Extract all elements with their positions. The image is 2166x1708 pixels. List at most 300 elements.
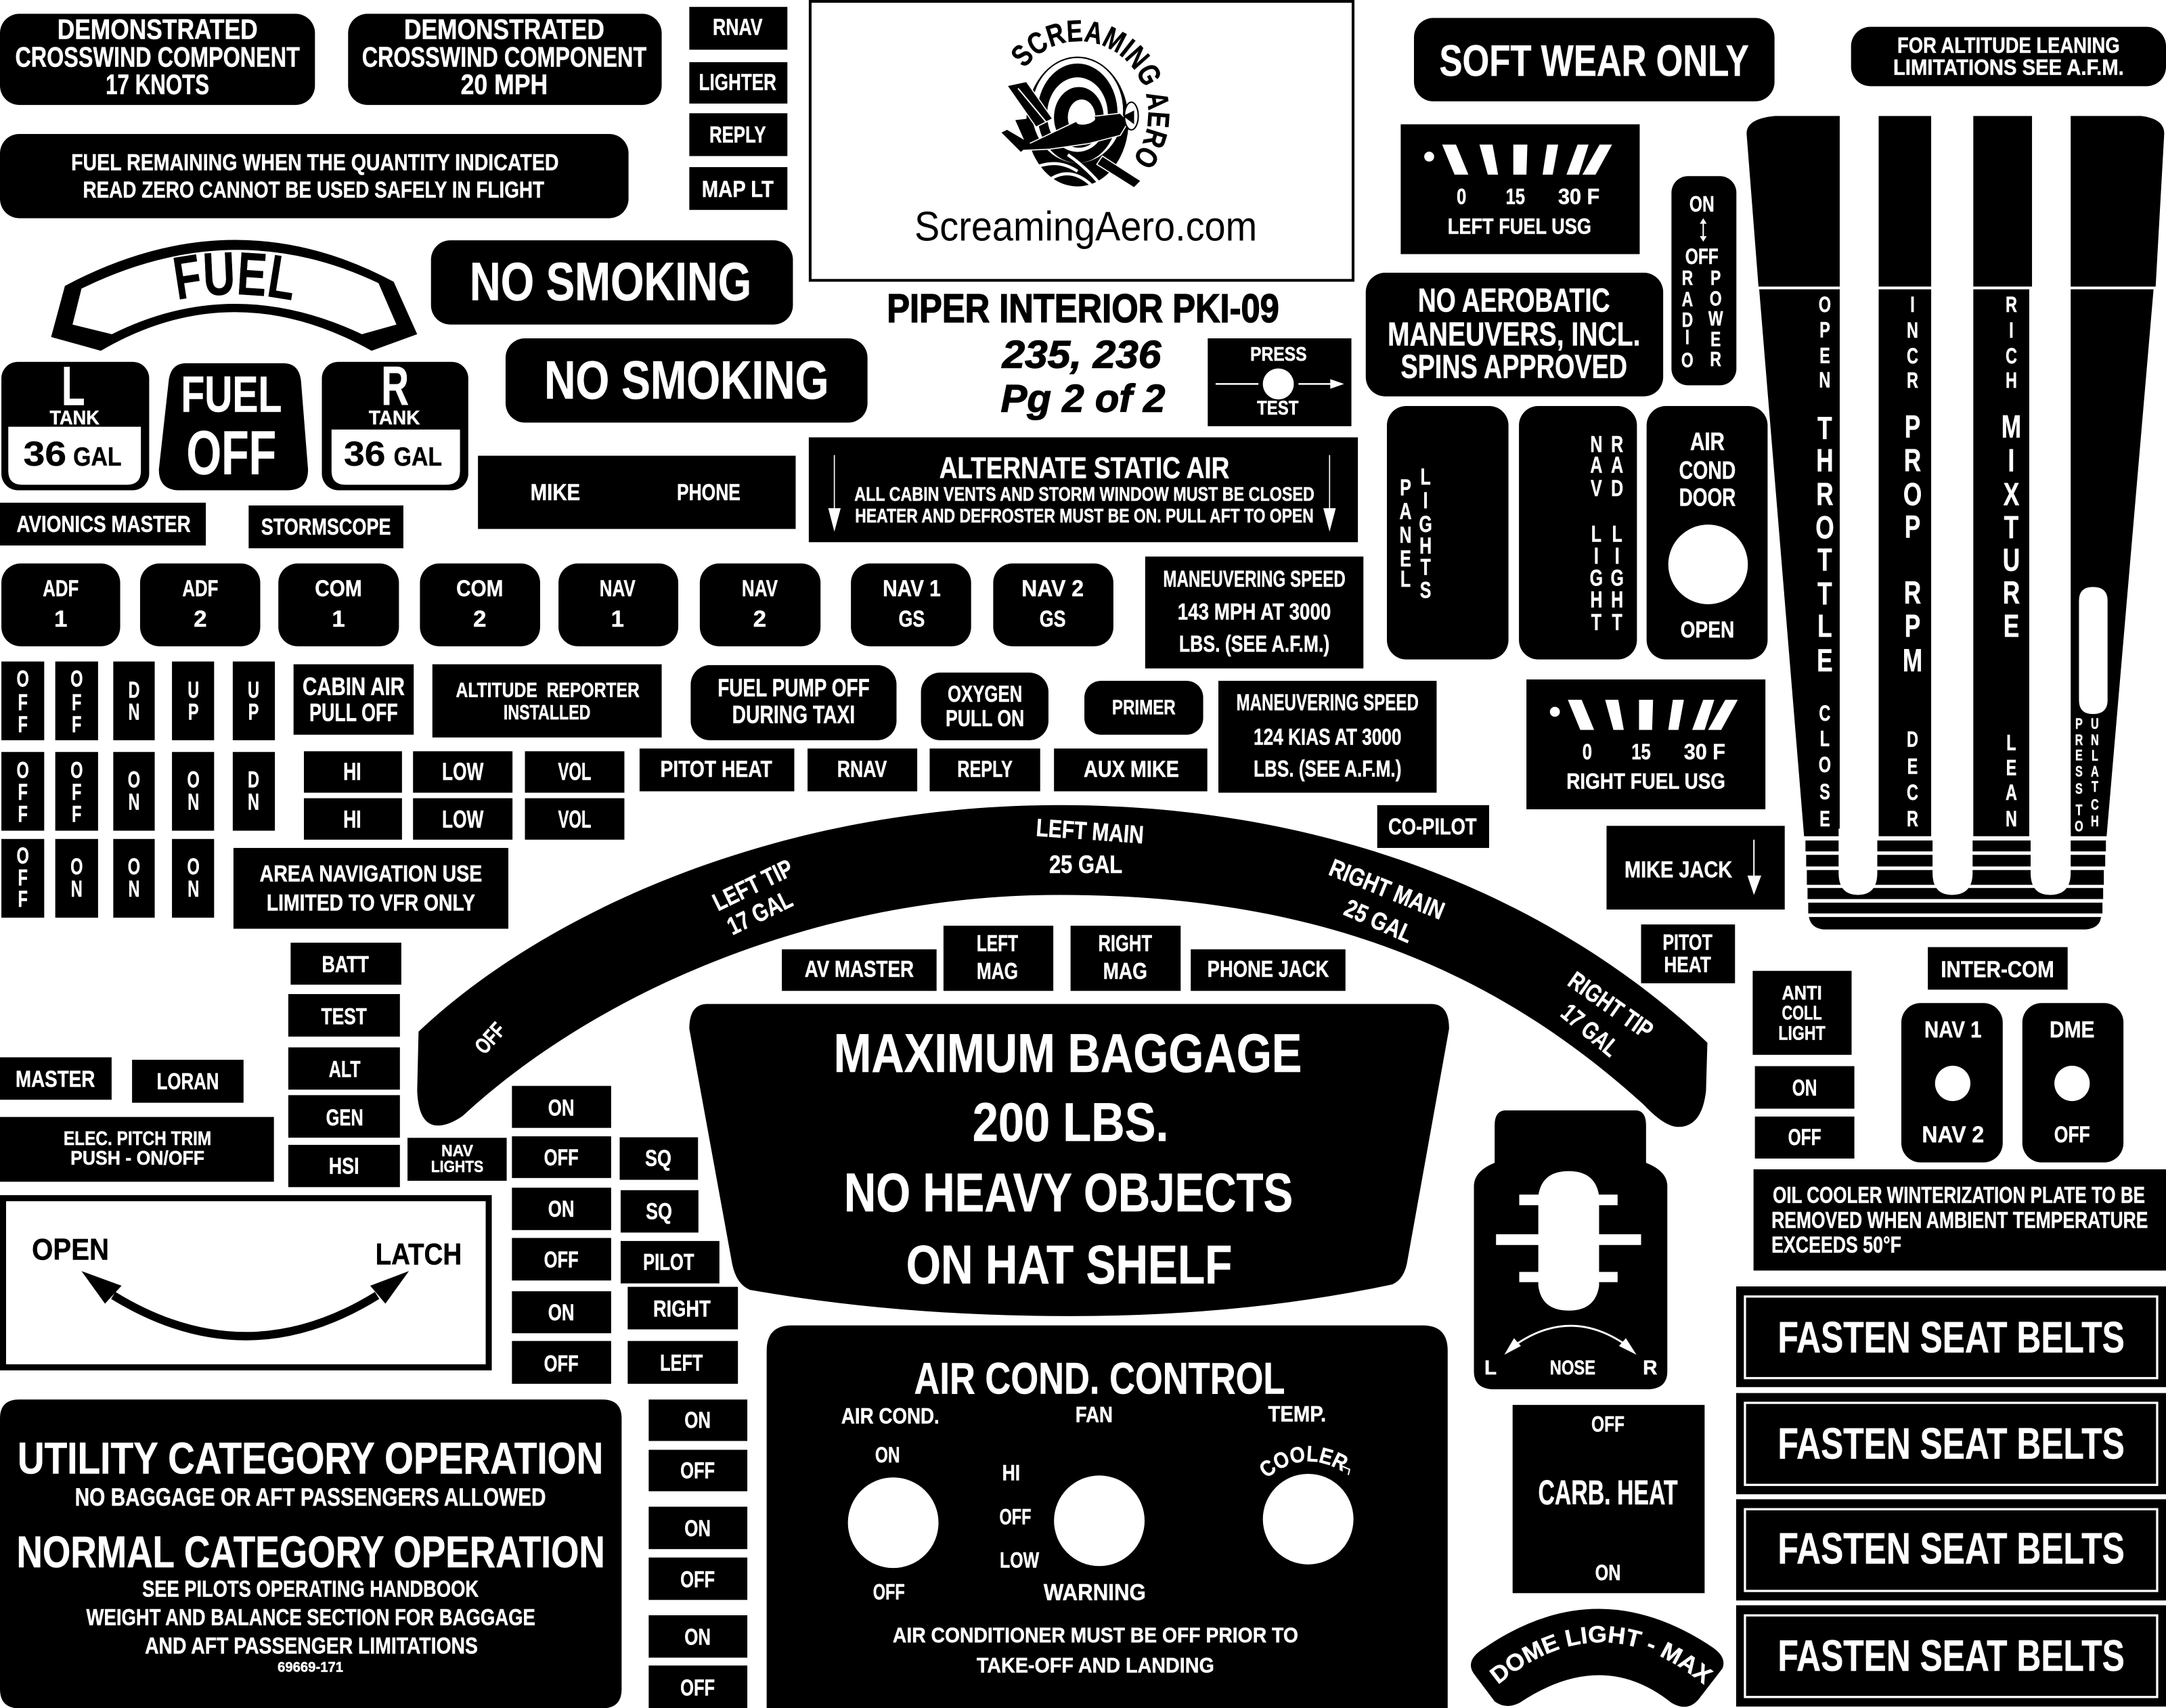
placard: left tank: TANK	[49, 407, 100, 429]
panel: nose gear selector: L	[1484, 1357, 1497, 1379]
fuel selector: left main: LEFT MAIN	[1035, 813, 1145, 849]
placard: nav and rad lights: A	[1611, 453, 1623, 478]
gauge: right fuel usage: 15	[1631, 739, 1651, 764]
vertical switch labels: row 2: O	[70, 757, 83, 784]
press to unlatch labels: E	[2075, 747, 2083, 764]
placard: radio power: O	[1710, 287, 1722, 310]
switch: COM 1: COM	[315, 576, 362, 602]
placard: nav and rad lights: G	[1590, 566, 1603, 591]
mixture labels: E	[2006, 756, 2016, 780]
label: OFF right	[1755, 1117, 1855, 1159]
prop labels	[1903, 292, 1922, 832]
label: AUX MIKE: AUX MIKE	[1084, 757, 1179, 782]
press to unlatch labels: T	[2075, 802, 2082, 819]
switch: COM 1: 1	[332, 606, 345, 632]
vertical switch labels: row 1: F	[72, 690, 81, 716]
label: ALT: ALT	[329, 1056, 361, 1082]
mixture labels: T	[2004, 510, 2018, 545]
vertical switch labels: row 3: O	[128, 854, 140, 880]
arrow: mike jack down	[1748, 840, 1761, 895]
label: INTER-COM	[1928, 947, 2068, 989]
throttle labels: S	[1819, 780, 1830, 805]
label group: hi low vol: VOL	[558, 806, 591, 833]
placard: no aerobatic maneuvers: MANEUVERS, INCL.	[1388, 317, 1640, 353]
switch: NAV 2	[700, 564, 820, 646]
placard: left tank: L	[62, 355, 85, 417]
label: RNAV lower	[808, 748, 917, 791]
label: LEFT	[627, 1341, 738, 1384]
throttle labels: O	[1819, 292, 1831, 317]
placard: oxygen pull on: OXYGEN	[948, 681, 1022, 707]
placard: open latch: LATCH	[376, 1236, 462, 1271]
placard: mike phone	[478, 455, 796, 529]
label: OFF right: OFF	[1788, 1125, 1821, 1150]
control: fan knob	[1000, 1401, 1146, 1606]
vertical switch labels: row 2: N	[128, 789, 139, 815]
placard: no aerobatic maneuvers: NO AEROBATIC	[1418, 283, 1610, 319]
throttle labels: R	[1816, 476, 1834, 512]
throttle labels: T	[1817, 410, 1832, 446]
label: NAV LIGHTS	[407, 1138, 507, 1181]
placard: radio power	[1671, 176, 1736, 385]
label: SQ 2: SQ	[646, 1199, 672, 1225]
chart: fuel selector arc	[417, 805, 1707, 1127]
throttle labels: T	[1817, 576, 1832, 612]
on off column lower: OFF	[680, 1676, 715, 1701]
label: CO-PILOT: CO-PILOT	[1388, 814, 1477, 840]
label: REPLY: REPLY	[709, 122, 766, 148]
placard: radio power: R	[1682, 267, 1693, 290]
placard: fuel pump off during taxi	[690, 665, 896, 740]
mixture labels: E	[2004, 608, 2019, 644]
placard: press test: TEST	[1257, 398, 1299, 420]
throttle labels: T	[1817, 541, 1832, 577]
placard: no aerobatic maneuvers: SPINS APPROVED	[1400, 349, 1627, 385]
placard: panel lights: S	[1420, 578, 1431, 604]
vertical switch labels: row 2: N	[187, 789, 199, 815]
placard: cabin air pull off: PULL OFF	[309, 699, 398, 727]
label: RIGHT	[627, 1287, 738, 1329]
on off column center: ON	[548, 1300, 575, 1326]
vertical switch labels: row 1: F	[18, 712, 28, 738]
switch plate: DME OFF: OFF	[2054, 1122, 2090, 1148]
vertical switch labels: row 2	[1, 752, 275, 831]
placard: radio power: A	[1682, 288, 1693, 311]
placard: demonstrated crosswind 20 mph: CROSSWIND COMPONENT	[362, 41, 646, 72]
vertical switch labels: row 3: F	[18, 865, 28, 891]
label: ALT	[288, 1048, 400, 1089]
vertical switch labels: row 2: D	[248, 767, 259, 793]
press to unlatch labels: S	[2075, 780, 2083, 798]
placard: utility and normal category: SEE PILOTS OPERATING HANDBOOK	[142, 1577, 479, 1602]
press to unlatch labels: C	[2091, 796, 2099, 813]
control: air cond knob: AIR COND.	[841, 1403, 940, 1428]
vertical switch labels: row 1: U	[187, 677, 199, 703]
placard: oxygen pull on: PULL ON	[946, 706, 1024, 732]
label: REPLY	[689, 113, 787, 156]
on off column center: OFF	[544, 1247, 579, 1273]
subtitle: page number: Pg 2 of 2	[1001, 378, 1166, 421]
label: anti coll light	[1752, 971, 1852, 1055]
placard: no smoking 2: NO SMOKING	[544, 350, 828, 410]
placard: demonstrated crosswind 17 knots	[0, 14, 315, 105]
label: anti coll light: COLL	[1782, 1003, 1822, 1025]
placard: nav and rad lights: H	[1611, 587, 1623, 613]
placard: utility and normal category	[0, 1399, 621, 1708]
label: RIGHT MAG	[1071, 926, 1180, 991]
placard: air cond door: DOOR	[1679, 483, 1736, 511]
placard: no aerobatic maneuvers	[1366, 273, 1663, 397]
label: ON right: ON	[1792, 1075, 1817, 1101]
label: MAP LT	[689, 167, 787, 210]
placard: alternate static air: HEATER AND DEFROSTER MUST BE ON. PULL AFT TO OPEN	[855, 505, 1314, 527]
placard: maximum baggage: ON HAT SHELF	[906, 1234, 1232, 1295]
placard: fuel off	[159, 363, 308, 490]
label: LEFT MAG	[944, 926, 1053, 991]
placard: radio power: ON	[1689, 192, 1715, 217]
placard: fuel pump off during taxi: FUEL PUMP OFF	[717, 674, 870, 702]
panel: air cond control: TAKE-OFF AND LANDING	[977, 1653, 1214, 1677]
placard: panel lights: E	[1400, 546, 1411, 572]
placard: open latch	[3, 1198, 489, 1368]
fuel selector: right tip: 17 GAL	[1555, 998, 1624, 1062]
placard: soft wear only	[1414, 18, 1775, 102]
placard: radio power: P	[1710, 267, 1721, 290]
on off column center: ON	[548, 1095, 575, 1121]
placard: nav and rad lights	[1519, 406, 1637, 659]
control: air cond knob: OFF	[873, 1579, 905, 1604]
gauge: left fuel usage: 0	[1457, 183, 1466, 208]
prop labels: D	[1907, 727, 1918, 752]
placard: panel lights: G	[1419, 512, 1432, 537]
placard: demonstrated crosswind 20 mph: DEMONSTRATED	[404, 14, 604, 45]
mixture labels: U	[2003, 541, 2020, 577]
vertical switch labels: row 2: F	[18, 780, 28, 805]
switch: NAV 1 GS: GS	[899, 606, 925, 632]
label: pitot heat right	[1641, 924, 1735, 983]
placard: fasten seat belts 2	[1736, 1393, 2166, 1494]
panel: nose gear selector: R	[1643, 1357, 1657, 1379]
placard: open latch: OPEN	[32, 1232, 109, 1267]
prop labels: P	[1905, 608, 1920, 644]
throttle labels	[1815, 292, 1834, 832]
label: GEN	[288, 1095, 400, 1138]
switch plate: NAV 1 NAV 2: NAV 2	[1922, 1122, 1984, 1148]
switch: COM 2	[420, 564, 540, 646]
mixture labels	[2002, 292, 2021, 832]
panel: nose gear selector: NOSE	[1550, 1357, 1595, 1379]
gauge: right fuel usage: 30 F	[1684, 739, 1725, 764]
label: RIGHT MAG: RIGHT	[1098, 931, 1152, 957]
placard: nav and rad lights: T	[1612, 610, 1622, 635]
label: LORAN	[132, 1060, 244, 1103]
mixture labels: R	[2003, 575, 2020, 610]
vertical switch labels: row 3: O	[187, 854, 200, 880]
on off column lower: ON	[684, 1625, 711, 1650]
placard: carb heat	[1513, 1405, 1704, 1593]
placard: altitude leaning	[1851, 27, 2166, 86]
press to unlatch labels: L	[2092, 748, 2098, 765]
switch: ADF 1	[1, 564, 120, 646]
switch: ADF 1: ADF	[43, 576, 79, 602]
placard: maneuvering speed 124 kias: MANEUVERING SPEED	[1237, 690, 1419, 715]
placard: radio power: I	[1685, 325, 1689, 349]
fuel selector: left tip: LEFT TIP	[708, 854, 797, 916]
vertical switch labels: row 1	[1, 662, 275, 740]
placard: altitude reporter installed: INSTALLED	[504, 701, 590, 724]
switch: ADF 2	[140, 564, 260, 646]
vertical switch labels: row 1: O	[16, 666, 29, 692]
fuel selector: OFF: OFF	[469, 1017, 510, 1058]
placard: nav and rad lights: N	[1590, 432, 1602, 457]
placard: nav and rad lights: D	[1611, 476, 1623, 501]
logo text: Screaming Aero arc: SCREAMING AERO	[1011, 20, 1170, 167]
placard: area navigation: AREA NAVIGATION USE	[260, 861, 482, 886]
control: fan knob: WARNING	[1044, 1580, 1146, 1606]
label: anti coll light: ANTI	[1782, 983, 1822, 1004]
placard: panel lights: N	[1400, 522, 1412, 548]
label: LORAN: LORAN	[157, 1069, 219, 1095]
placard: demonstrated crosswind 20 mph	[348, 14, 662, 105]
label: MASTER	[0, 1057, 112, 1100]
panel: nose gear selector	[1474, 1110, 1667, 1389]
control: fan knob: HI	[1002, 1460, 1020, 1485]
placard: right tank: 36	[344, 434, 385, 473]
placard: utility and normal category: UTILITY CATEGORY OPERATION	[18, 1433, 603, 1483]
press to unlatch labels: R	[2075, 732, 2083, 749]
gauge: left fuel usage: LEFT FUEL USG	[1448, 213, 1591, 238]
throttle labels: E	[1819, 344, 1830, 369]
placard: panel lights: I	[1423, 488, 1428, 514]
arrow: left down	[828, 455, 841, 532]
placard: air cond door: AIR	[1690, 428, 1725, 455]
placard: cabin air pull off: CABIN AIR	[303, 673, 405, 700]
placard: elec pitch trim	[0, 1117, 274, 1182]
prop labels: M	[1903, 642, 1922, 678]
switch: COM 1	[278, 564, 399, 646]
panel: air cond control	[766, 1325, 1448, 1708]
logo icon: swirl and airplane	[1002, 57, 1141, 188]
label: HSI: HSI	[329, 1153, 359, 1179]
placard: fuel remaining warning	[0, 134, 629, 218]
throttle labels: C	[1819, 701, 1830, 726]
placard: air cond door: COND	[1679, 457, 1736, 485]
placard: radio power: D	[1682, 309, 1693, 332]
control: fan knob: OFF	[1000, 1504, 1031, 1529]
label: anti coll light: LIGHT	[1778, 1023, 1826, 1045]
placard: mike phone: PHONE	[677, 480, 741, 505]
label: pitot heat	[640, 748, 794, 791]
vertical switch labels: row 3	[1, 839, 214, 918]
placard: panel lights: T	[1420, 555, 1431, 580]
placard: maneuvering speed 143 mph: 143 MPH AT 3000	[1178, 600, 1331, 625]
placard: dome light max	[1471, 1609, 1723, 1707]
placard: nav and rad lights: A	[1590, 453, 1603, 478]
label: pitot heat right: HEAT	[1664, 952, 1711, 977]
label group: hi low vol: VOL	[558, 758, 591, 785]
label: NAV LIGHTS: NAV	[441, 1142, 474, 1161]
switch: NAV 2 GS: NAV 2	[1021, 576, 1084, 602]
placard: utility and normal category: WEIGHT AND BALANCE SECTION FOR BAGGAGE	[87, 1604, 535, 1630]
quadrant bottom stripes	[1805, 828, 2106, 929]
switch: NAV 2: 2	[753, 606, 766, 632]
vertical switch labels: row 2: F	[18, 801, 28, 828]
panel: air cond control: AIR CONDITIONER MUST BE OFF PRIOR TO	[893, 1623, 1298, 1647]
press to unlatch labels: S	[2075, 763, 2083, 780]
placard: area navigation: LIMITED TO VFR ONLY	[267, 890, 475, 916]
placard: oil cooler: EXCEEDS 50°F	[1771, 1232, 1901, 1258]
switch: NAV 1 GS	[851, 564, 971, 646]
label: SQ 1: SQ	[645, 1146, 671, 1171]
switch: NAV 1	[558, 564, 678, 646]
vertical switch labels: row 2: O	[187, 767, 200, 793]
control: fan knob: FAN	[1076, 1401, 1113, 1426]
fuel selector: left tip: 17 GAL	[722, 885, 797, 941]
press to unlatch labels: T	[2092, 778, 2098, 796]
placard: elec pitch trim: ELEC. PITCH TRIM	[64, 1128, 211, 1150]
mixture labels: M	[2002, 409, 2021, 445]
placard: carb heat: CARB. HEAT	[1538, 1473, 1678, 1512]
prop labels: R	[1904, 575, 1921, 610]
placard: maneuvering speed 143 mph: MANEUVERING SPEED	[1163, 566, 1346, 592]
placard: air cond door: OPEN	[1681, 617, 1734, 643]
switch: COM 2: COM	[456, 576, 503, 602]
control: temp knob: TEMP.	[1268, 1401, 1326, 1426]
placard: demonstrated crosswind 20 mph: 20 MPH	[461, 68, 548, 100]
placard: alternate static air: ALTERNATE STATIC AIR	[940, 451, 1229, 485]
prop labels: I	[1910, 292, 1915, 317]
vertical switch labels: row 1: F	[72, 712, 81, 738]
placard: maneuvering speed 124 kias: 124 KIAS AT 3000	[1254, 724, 1401, 750]
on off column lower: OFF	[680, 1567, 715, 1592]
prop labels: R	[1907, 807, 1918, 832]
label: LIGHTER: LIGHTER	[699, 70, 776, 95]
switch: NAV 2: NAV	[742, 576, 778, 602]
placard: radio power: E	[1710, 328, 1721, 351]
placard: maneuvering speed 124 kias: LBS. (SEE A.F.M.)	[1254, 756, 1401, 782]
arrow: double headed curve	[81, 1271, 409, 1336]
switch: NAV 1: NAV	[600, 576, 636, 602]
press to unlatch labels: N	[2091, 732, 2099, 749]
placard: panel lights: L	[1420, 464, 1431, 490]
prop labels: C	[1907, 780, 1918, 805]
vertical switch labels: row 3: O	[16, 843, 29, 869]
vertical switch labels: row 2: N	[248, 789, 259, 815]
placard: panel lights: H	[1419, 533, 1432, 559]
placard: carb heat: ON	[1595, 1560, 1620, 1585]
label: LEFT MAG: MAG	[977, 959, 1018, 985]
label group: hi low vol: LOW	[442, 758, 484, 785]
throttle labels: N	[1819, 368, 1830, 392]
gauge: left fuel usage	[1400, 125, 1639, 254]
quadrant upper segments	[1746, 116, 2164, 286]
switch: ADF 2: ADF	[182, 576, 218, 602]
vertical switch labels: row 3: N	[71, 876, 83, 902]
fuel selector: right main: RIGHT MAIN	[1325, 853, 1449, 925]
on off column center	[512, 1086, 611, 1384]
placard: press test: PRESS	[1250, 344, 1307, 365]
on off column lower: ON	[684, 1408, 711, 1433]
label: INTER-COM: INTER-COM	[1941, 957, 2054, 983]
label: pitot heat right: PITOT	[1662, 930, 1712, 955]
switch: ADF 1: 1	[54, 606, 67, 632]
placard: nav and rad lights: L	[1591, 522, 1601, 547]
arrow: right down	[1323, 455, 1335, 532]
vertical switch labels: row 1: D	[128, 677, 139, 703]
label group: hi low vol: LOW	[442, 806, 484, 833]
placard: maneuvering speed 143 mph	[1145, 556, 1363, 669]
placard: fasten seat belts 1	[1736, 1286, 2166, 1387]
label: MAP LT: MAP LT	[702, 177, 774, 202]
placard: left tank	[1, 355, 149, 490]
placard: fuel remaining warning: FUEL REMAINING WHEN THE QUANTITY INDICATED	[71, 150, 559, 175]
label group: hi low vol	[304, 751, 624, 840]
placard: mike jack	[1606, 826, 1785, 909]
label: pitot heat: PITOT HEAT	[661, 757, 772, 782]
icon: fuel arch	[51, 240, 417, 351]
placard: utility and normal category: AND AFT PASSENGER LIMITATIONS	[145, 1633, 478, 1659]
placard: no smoking 2	[506, 338, 868, 422]
placard: utility and normal category: NO BAGGAGE OR AFT PASSENGERS ALLOWED	[75, 1483, 546, 1511]
gauge: left fuel usage: 15	[1505, 183, 1525, 208]
placard: maximum baggage: 200 LBS.	[973, 1092, 1169, 1153]
placard: right tank: TANK	[369, 407, 420, 429]
mixture labels: H	[2006, 369, 2017, 393]
on off column center: OFF	[544, 1351, 579, 1376]
mixture labels: C	[2006, 344, 2017, 369]
placard: primer: PRIMER	[1112, 696, 1176, 719]
label group: hi low vol: HI	[343, 758, 361, 785]
gauge: right fuel usage: 0	[1583, 739, 1592, 764]
label: PHONE JACK	[1191, 949, 1346, 991]
on off column center: OFF	[544, 1145, 579, 1171]
mixture labels: L	[2006, 731, 2016, 756]
fuel selector: left tip	[708, 854, 797, 941]
placard: demonstrated crosswind 17 knots: 17 KNOTS	[106, 68, 209, 100]
vertical switch labels: row 2: O	[16, 757, 29, 784]
press to unlatch labels: A	[2091, 763, 2099, 780]
placard: oxygen pull on	[921, 673, 1048, 740]
label: REPLY lower: REPLY	[957, 757, 1013, 782]
control: temp knob: COOLER	[1260, 1445, 1348, 1476]
switch plate: NAV 1 NAV 2	[1901, 1003, 2003, 1163]
subtitle: model numbers: 235, 236	[1002, 333, 1162, 376]
placard: utility and normal category: 69669-171	[278, 1659, 343, 1676]
prop labels: P	[1905, 508, 1920, 544]
title: Piper Interior PKI-09: PIPER INTERIOR PKI-09	[887, 286, 1279, 331]
placard: nav and rad lights: T	[1591, 610, 1601, 635]
vertical switch labels: row 1: P	[248, 699, 259, 725]
label: AV MASTER	[782, 949, 937, 991]
placard: nav and rad lights: L	[1612, 522, 1622, 547]
placard: press test	[1208, 338, 1352, 426]
label: NAV LIGHTS: LIGHTS	[431, 1158, 483, 1176]
vertical switch labels: row 1: F	[18, 690, 28, 716]
label: LIGHTER	[689, 62, 787, 104]
placard: carb heat: OFF	[1591, 1412, 1624, 1437]
label: RIGHT MAG: MAG	[1103, 959, 1147, 985]
throttle labels: E	[1819, 807, 1830, 832]
label: stormscope: STORMSCOPE	[261, 514, 391, 540]
fuel selector: right tip: RIGHT TIP	[1563, 966, 1658, 1044]
placard: alternate static air	[809, 437, 1358, 542]
label: TEST: TEST	[321, 1004, 367, 1029]
placard: right tank	[322, 355, 468, 490]
label: AV MASTER: AV MASTER	[805, 956, 914, 982]
vertical switch labels: row 1: U	[248, 677, 259, 703]
switch plate: NAV 1 NAV 2: NAV 1	[1924, 1017, 1982, 1043]
placard: fuel pump off during taxi: DURING TAXI	[732, 701, 855, 729]
